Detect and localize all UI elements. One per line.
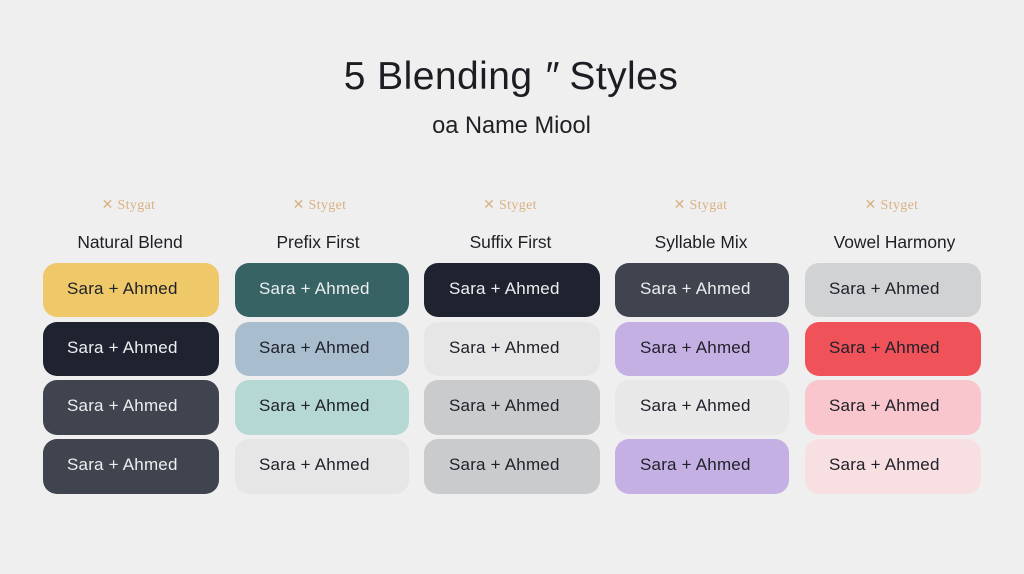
card 4 [235,439,409,494]
panel: Prefix First [235,198,409,494]
panel: Natural Blend [43,198,219,494]
tag: ✕ Styget [483,198,537,213]
card 4 [615,439,789,494]
card 2 [805,322,981,376]
panel: Vowel Harmony [805,198,981,494]
card 4: Sara + Ahmed [67,455,178,474]
tag: ✕ Styget [865,198,918,213]
card 2: Sara + Ahmed [259,338,370,357]
card 2: Sara + Ahmed [449,338,560,357]
card 3 [615,380,789,435]
card 1 [615,263,789,317]
card 2: Sara + Ahmed [67,338,178,357]
tag: ✕ Styget [293,198,346,213]
column heading: Vowel Harmony [834,232,955,252]
card 3: Sara + Ahmed [259,396,370,415]
card 2: Sara + Ahmed [640,338,751,357]
card 1: Sara + Ahmed [67,279,178,298]
subtitle: oa Name Miool [432,113,591,139]
column heading: Natural Blend [77,232,183,252]
column heading: Suffix First [470,232,551,252]
card 1 [424,263,600,317]
card 4: Sara + Ahmed [259,455,370,474]
card 4: Sara + Ahmed [449,455,560,474]
card 4 [805,439,981,494]
card 3: Sara + Ahmed [449,396,560,415]
card 1: Sara + Ahmed [640,279,751,298]
panel: Syllable Mix [615,198,789,494]
card 4 [424,439,600,494]
card 1 [805,263,981,317]
column heading: Prefix First [276,232,360,252]
card 2 [235,322,409,376]
panel: Suffix First [424,198,600,494]
card 3 [805,380,981,435]
tag: ✕ Stygat [674,198,727,213]
card 3 [43,380,219,435]
card 3: Sara + Ahmed [67,396,178,415]
card 3: Sara + Ahmed [829,396,940,415]
card 2 [615,322,789,376]
card 4: Sara + Ahmed [829,455,940,474]
card 4 [43,439,219,494]
card 2 [43,322,219,376]
card 1 [235,263,409,317]
tag: ✕ Stygat [102,198,155,213]
card 2: Sara + Ahmed [829,338,940,357]
card 1: Sara + Ahmed [259,279,370,298]
title: 5 Blending ″ Styles [344,55,678,98]
card 3: Sara + Ahmed [640,396,751,415]
card 1: Sara + Ahmed [829,279,940,298]
card 3 [235,380,409,435]
card 4: Sara + Ahmed [640,455,751,474]
card 2 [424,322,600,376]
card 1: Sara + Ahmed [449,279,560,298]
card 3 [424,380,600,435]
column heading: Syllable Mix [655,232,747,252]
card 1 [43,263,219,317]
